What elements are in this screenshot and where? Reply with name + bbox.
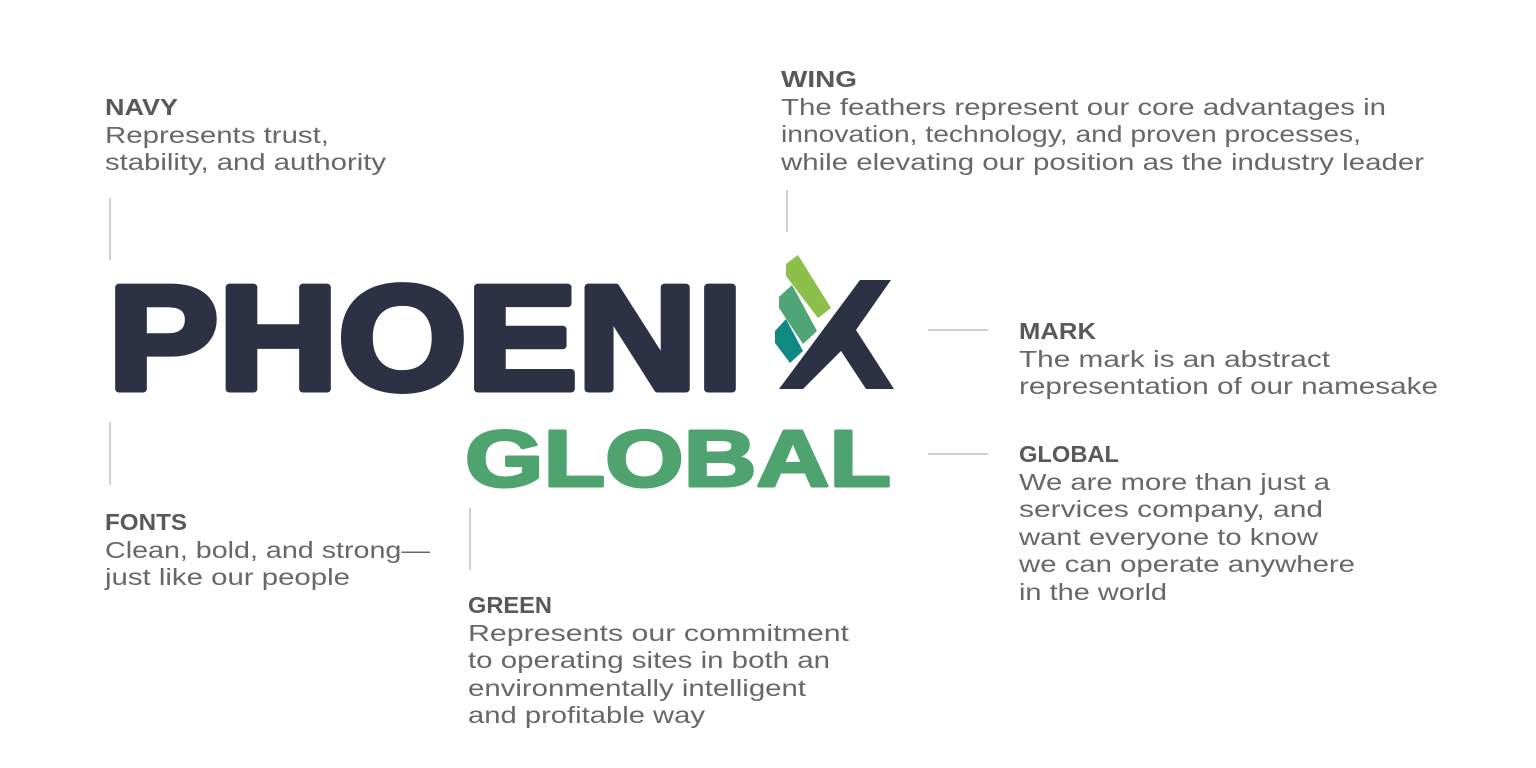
callout: global: in the world [1019,579,1167,605]
callout: global: GLOBAL [1019,441,1119,467]
callout: fonts: FONTS [105,509,187,535]
callout: navy: NAVY [105,94,178,120]
callout: mark: representation of our namesake [1019,373,1438,399]
callout: mark: MARK [1019,318,1096,344]
callout: wing: while elevating our position as the industry leader [780,149,1424,175]
callout: green: to operating sites in both an [468,647,830,673]
callout: navy: Represents trust, [105,122,329,148]
icon: feathers [775,255,831,363]
callout: green: environmentally intelligent [468,675,807,701]
logo: phoenix wordmark: PHOENI [108,256,743,421]
callout: global: we can operate anywhere [1018,551,1355,577]
callout: navy: stability, and authority [105,149,387,175]
callout: fonts [104,422,430,590]
callout: fonts: Clean, bold, and strong— [105,537,430,563]
logo: phoenix wordmark [108,255,894,503]
callout: global: We are more than just a [1019,469,1330,495]
callout: global [928,441,1355,605]
callout: green: GREEN [468,592,552,618]
callout: green: Represents our commitment [468,620,850,646]
callout: global: want everyone to know [1018,524,1318,550]
callout: wing: The feathers represent our core advantages in [781,94,1386,120]
callout: fonts: just like our people [104,564,350,590]
callout: navy [105,94,387,260]
callout: wing: innovation, technology, and proven processes, [781,121,1361,147]
callout: green [468,508,850,728]
callout: global: services company, and [1019,496,1323,522]
callout: mark: The mark is an abstract [1019,346,1331,372]
logo: phoenix wordmark: GLOBAL [465,414,891,503]
callout: mark [928,318,1438,399]
callout: green: and profitable way [468,702,706,728]
icon: X [779,280,894,389]
callout: wing: WING [781,66,857,92]
callout: wing [780,66,1424,232]
